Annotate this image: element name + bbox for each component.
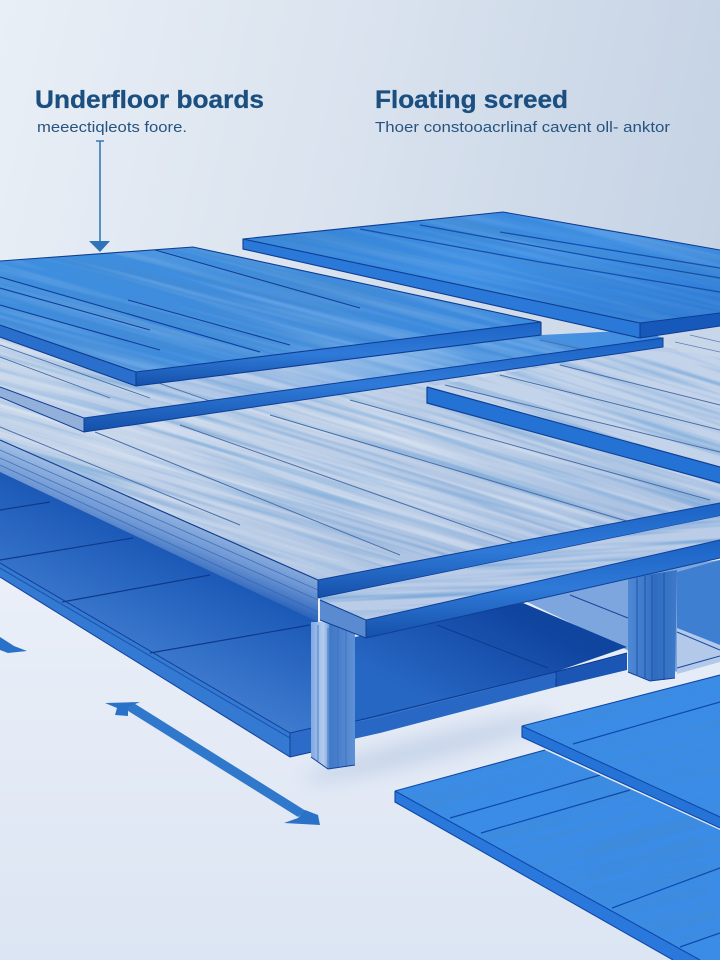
heading: Floating screed: Floating screed [375,86,568,114]
caption: floating screed: Thoer constooacrlinaf cavent oll- anktor [375,119,670,136]
arrow: partial dimension at left edge [0,637,27,653]
lower floor structure [0,465,720,769]
heading: Underfloor boards: Underfloor boards [35,86,264,114]
board: lower sheet [394,750,720,960]
heading block: floating screed [375,86,670,136]
arrow: double-headed dimension [105,702,320,825]
floor panel: left [0,465,318,757]
loose boards: lower right [394,674,720,960]
board: top right blue [242,212,720,338]
board: top left blue [0,246,542,386]
floor panel: right [340,603,627,742]
post: front support [311,622,355,769]
heading block: underfloor boards [35,86,264,136]
back floor panels [523,560,720,674]
board: mid right deck strip [426,350,720,484]
arrow: pointer to underfloor boards [89,141,110,252]
board: far right sliver [663,328,720,357]
board: upper sheet [521,674,720,828]
board stack [0,212,720,638]
board: middle layer [0,332,664,432]
board: large pale deck [0,347,720,622]
board: lower pale step [320,516,720,638]
floor shadow [301,704,559,792]
caption: underfloor boards: meeectiqleots foore. [37,119,187,136]
post: rear support [628,570,677,681]
